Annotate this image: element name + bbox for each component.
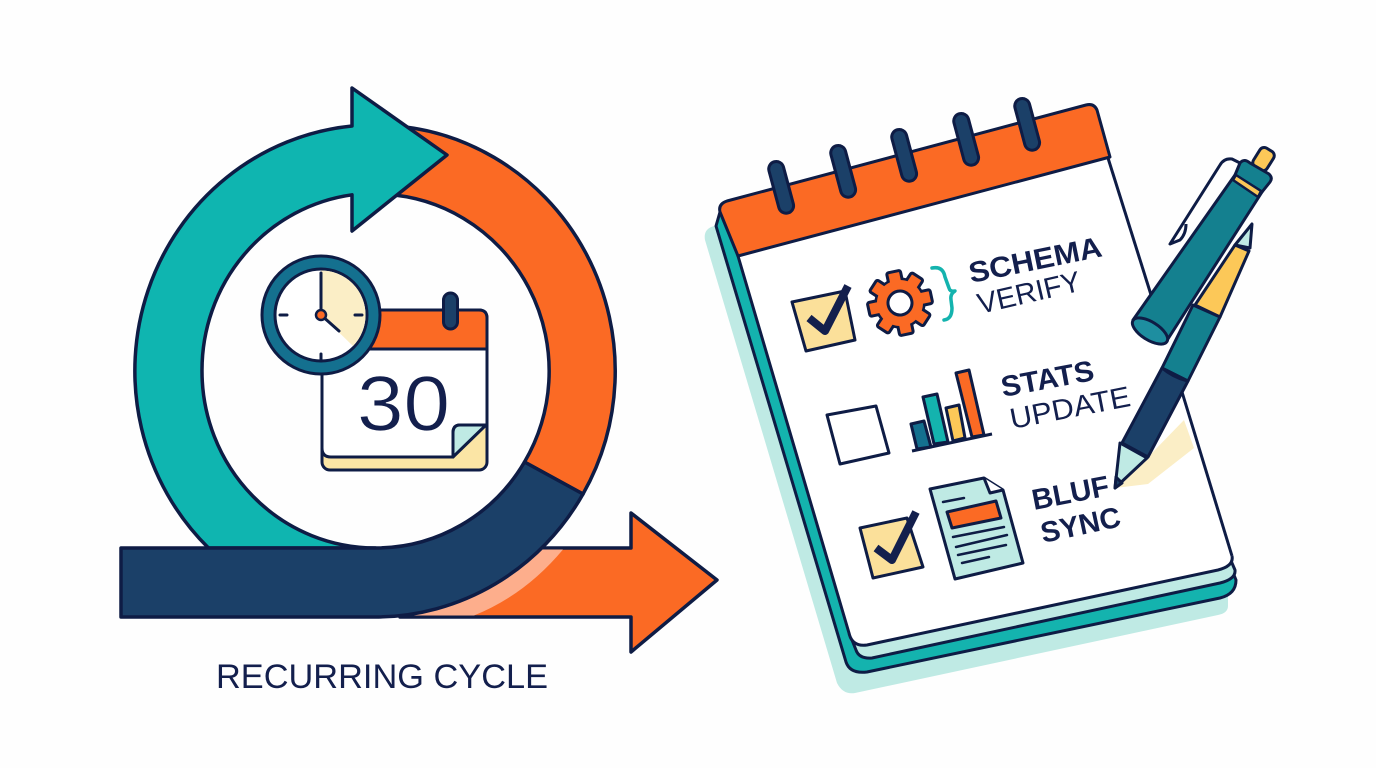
checkbox checked xyxy=(792,286,855,351)
notebook teal back cover xyxy=(716,205,1236,672)
label: bluf sync: SYNC xyxy=(1038,502,1124,550)
label: stats update: UPDATE xyxy=(1007,381,1133,436)
panel: notebook checklist xyxy=(705,97,1236,693)
cycle ring: navy arrow base xyxy=(121,462,583,617)
label: bluf sync xyxy=(1029,471,1124,550)
calendar number: 30 xyxy=(357,359,450,447)
label: schema verify: SCHEMA xyxy=(966,232,1105,290)
arrow: forward orange arrow xyxy=(400,513,717,652)
checkbox checked xyxy=(860,512,923,578)
notebook shadow xyxy=(705,226,1228,693)
checklist item: stats update xyxy=(827,355,1133,464)
label: bluf sync: BLUF xyxy=(1029,471,1112,517)
icon: document xyxy=(930,478,1023,579)
checklist item: schema verify xyxy=(792,232,1105,351)
notebook white page xyxy=(738,158,1232,645)
label: schema verify: VERIFY xyxy=(974,266,1084,321)
label: stats update xyxy=(998,355,1133,436)
checkbox empty xyxy=(827,406,889,464)
icon: gear xyxy=(862,265,938,341)
icon: curly brace xyxy=(932,268,955,320)
notebook page stack xyxy=(852,540,1235,658)
notebook spiral rings xyxy=(767,97,1041,215)
pen body xyxy=(1115,224,1252,488)
label: schema verify xyxy=(966,232,1105,321)
icon: calendar with day 30 xyxy=(322,293,487,470)
pen cap xyxy=(1128,146,1276,349)
checklist item: bluf sync xyxy=(860,471,1124,579)
notebook orange header xyxy=(720,105,1110,256)
icon: pen and cap xyxy=(1115,146,1276,488)
heading: recurring cycle label: RECURRING CYCLE xyxy=(216,658,548,696)
cycle ring: teal arrow xyxy=(135,88,447,548)
label: stats update: STATS xyxy=(998,355,1097,404)
icon: bar chart xyxy=(911,370,992,451)
icon: clock xyxy=(262,256,380,374)
panel: recurring cycle diagram xyxy=(121,88,717,652)
pen highlight stroke xyxy=(1115,420,1194,488)
cycle ring: orange segment xyxy=(385,125,615,494)
